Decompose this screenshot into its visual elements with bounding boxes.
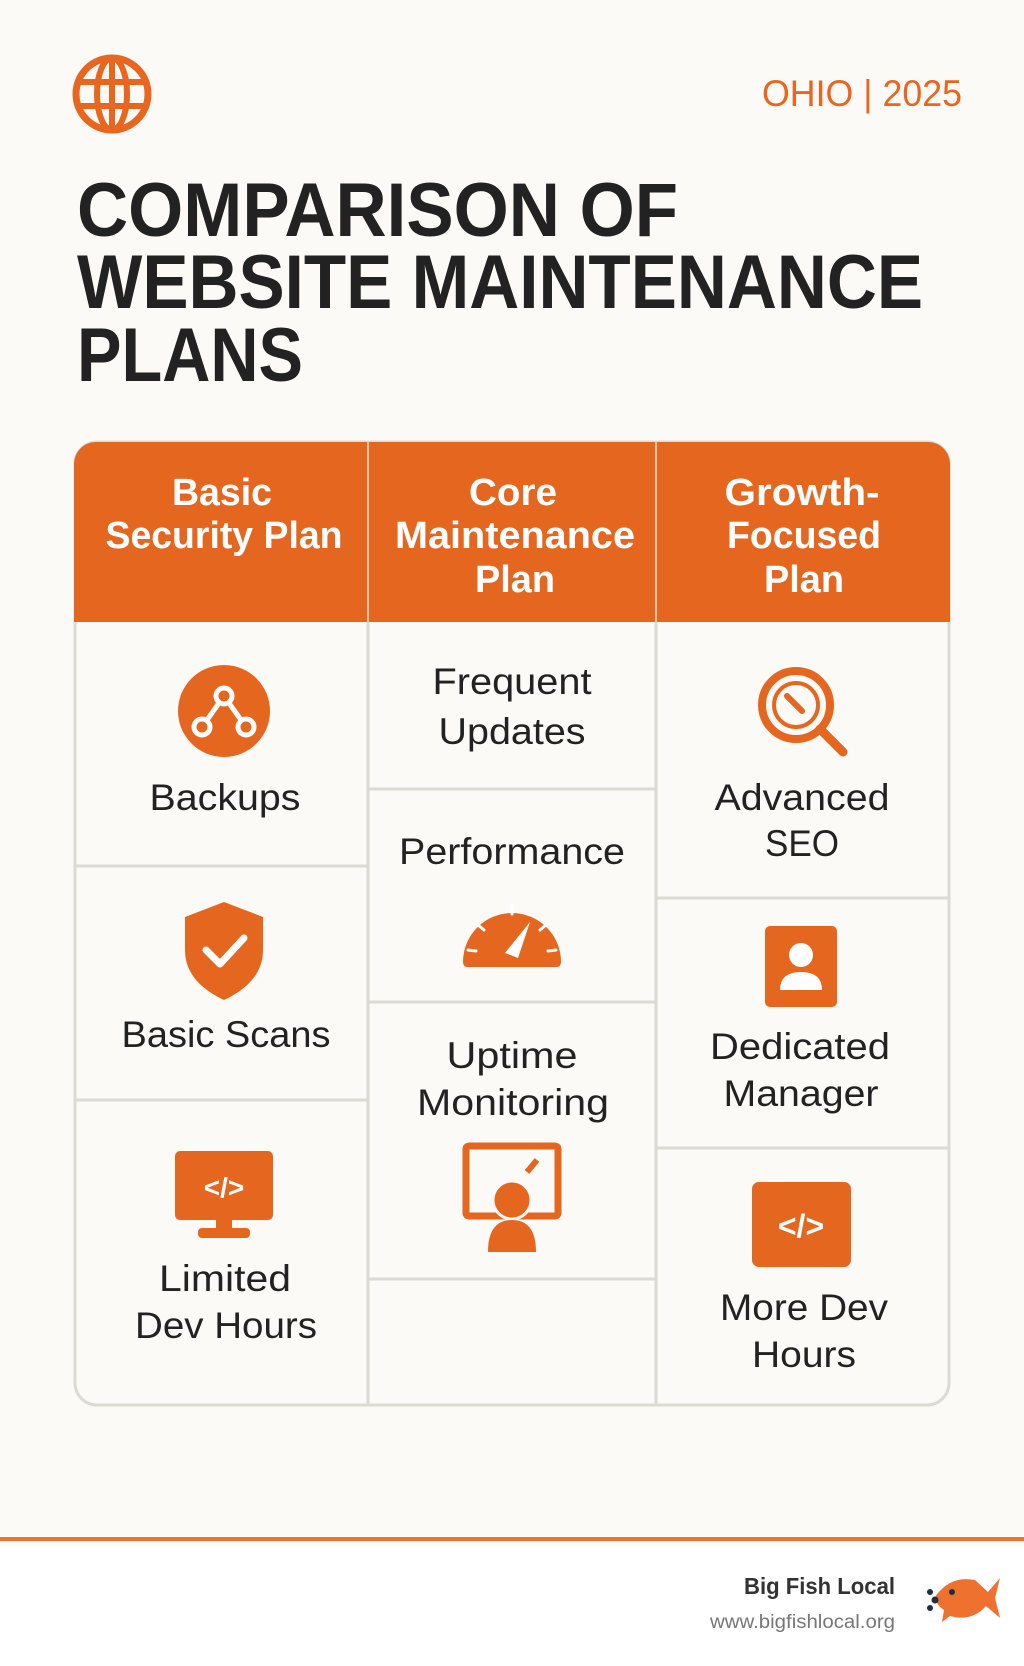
table header: Plan (764, 559, 844, 601)
footer brand name: Big Fish Local (744, 1573, 895, 1599)
location and year: OHIO | 2025 (762, 73, 962, 114)
title: COMPARISON OF (77, 168, 678, 253)
cell: More Dev Hours: More Dev (720, 1287, 889, 1328)
cell: Backups: Backups (150, 777, 300, 818)
comparison table (74, 442, 950, 1405)
cell: Uptime Monitoring: Monitoring (417, 1082, 609, 1123)
table header: Basic (172, 472, 272, 514)
cell: Frequent Updates: Updates (438, 711, 586, 752)
cell: Dedicated Manager (710, 926, 890, 1114)
table header: Core (469, 472, 557, 514)
icon: fish logo (927, 1578, 1000, 1622)
footer (0, 1537, 1024, 1666)
cell: Advanced SEO: SEO (765, 823, 839, 864)
title: PLANS (77, 313, 303, 398)
cell: Basic Scans: Basic Scans (122, 1014, 330, 1055)
icon: globe (76, 58, 148, 130)
cell: Limited Dev Hours: </> (204, 1172, 244, 1203)
table header: Focused (727, 515, 881, 557)
cell: Limited Dev Hours: Dev Hours (135, 1305, 317, 1346)
footer url: www.bigfishlocal.org (709, 1612, 895, 1633)
cell: More Dev Hours (720, 1182, 889, 1375)
title (77, 168, 923, 398)
cell: Limited Dev Hours: Limited (159, 1258, 291, 1299)
cell: Basic Scans (122, 902, 330, 1055)
cell: Limited Dev Hours (135, 1151, 317, 1346)
cell: Performance: Performance (399, 831, 625, 872)
table header: Growth- (724, 472, 880, 514)
cell: Frequent Updates: Frequent (432, 661, 592, 702)
cell: Frequent Updates (432, 661, 592, 752)
cell: Dedicated Manager: Dedicated (710, 1026, 890, 1067)
cell: Uptime Monitoring (417, 1035, 609, 1252)
title: WEBSITE MAINTENANCE (77, 240, 923, 325)
table header (74, 442, 950, 622)
cell: Backups (150, 665, 300, 818)
cell: Performance (399, 831, 625, 967)
table header: Maintenance (395, 515, 635, 557)
cell: More Dev Hours: Hours (752, 1334, 856, 1375)
table header: Plan (475, 559, 555, 601)
cell: Dedicated Manager: Manager (724, 1073, 878, 1114)
table header: Security Plan (106, 515, 342, 557)
cell: Advanced SEO: Advanced (714, 777, 890, 818)
cell: More Dev Hours: </> (778, 1208, 824, 1244)
cell: Advanced SEO (714, 671, 890, 864)
cell: Uptime Monitoring: Uptime (446, 1035, 578, 1076)
